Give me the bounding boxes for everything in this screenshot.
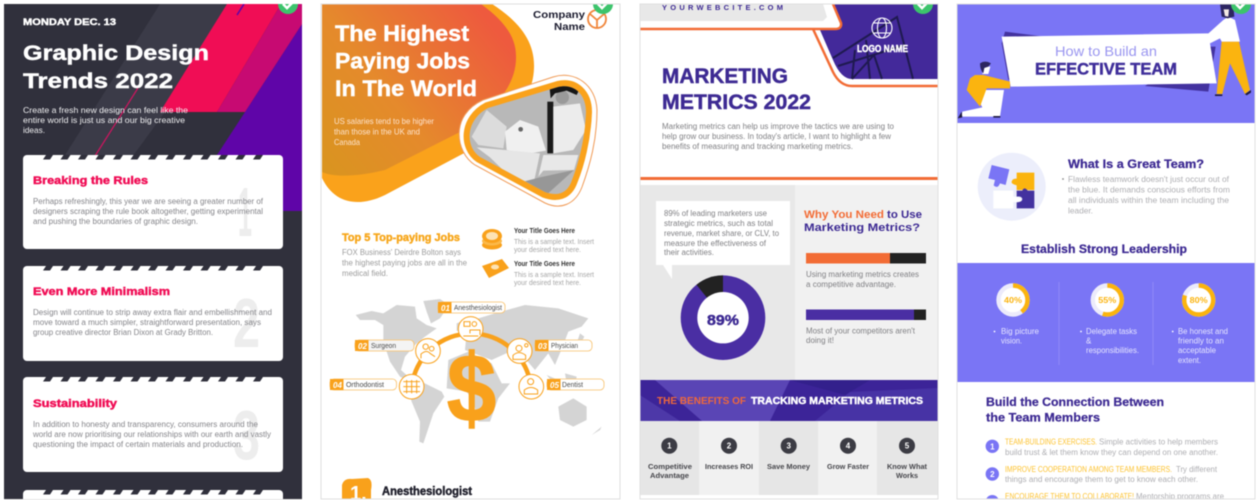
benefit 4 (818, 421, 877, 495)
top web address band: YOURWEBCITE.COM (662, 3, 783, 12)
heading: build the connection: Build the Connection Between (986, 395, 1164, 409)
text: title two: This is a sample text. Insert (514, 270, 595, 279)
card 4: cropped (23, 490, 283, 500)
card 2: even more minimalism: Design will continue to strip away extra flair and embellishment and (33, 308, 272, 317)
panel: effective team (957, 0, 1255, 500)
callout: measure the effectiveness of (664, 239, 767, 248)
card 1: breaking the rules: Perhaps refreshingly, this year we are seeing a greater number of (33, 197, 264, 206)
list: delegate tasks: Delegate tasks (1086, 327, 1137, 336)
title: Trends 2022 (23, 69, 173, 93)
benefit 1: Advantage (650, 471, 689, 480)
subtitle (334, 116, 434, 147)
card 3: sustainability: Sustainability (33, 398, 118, 410)
label 05 dentist: Dentist (562, 380, 584, 389)
list item 1: 1 (990, 442, 995, 451)
label 05 dentist: 05 (550, 381, 559, 390)
donut chart 89% (681, 275, 765, 360)
subtitle: Canada (334, 137, 360, 147)
callout: strategic metrics, such as total (664, 219, 773, 228)
title (22, 43, 209, 90)
title: METRICS 2022 (662, 91, 811, 114)
text: title one: This is a sample text. Insert (514, 237, 595, 246)
callout: revenue, market share, or CLV, to (664, 229, 780, 238)
card 1: breaking the rules: 1 (238, 173, 252, 251)
bar two: Most of your competitors aren't (806, 326, 916, 336)
gauge 40% (998, 286, 1028, 314)
company logo: Company (533, 9, 585, 21)
gauge 80% (1184, 286, 1213, 314)
donut chart 89%: 89% (707, 312, 739, 329)
card 1: breaking the rules: designers scraping the rule book altogether, getting experimental (33, 207, 263, 216)
benefit 4: 4 (846, 442, 851, 451)
right bars column (795, 185, 938, 380)
callout: their activities. (664, 248, 714, 257)
job icons (399, 317, 544, 399)
card 3: sustainability: world are now prioritising our relationships with our earth and vastly (32, 430, 271, 439)
icon: puzzle (978, 153, 1046, 221)
heading: anesthesiologist: Anesthesiologist (382, 486, 472, 498)
company logo (533, 9, 606, 33)
label 03 physician: 03 (538, 342, 547, 351)
gauge 40%: 40% (1004, 296, 1022, 305)
list: big picture (994, 327, 1040, 346)
benefit 1: Competitive (648, 462, 692, 471)
heading: Why You Need (804, 209, 884, 221)
heading: Marketing Metrics? (804, 222, 920, 234)
list: delegate tasks (1080, 327, 1139, 355)
heading: to Use (887, 209, 922, 221)
heading: anesthesiologist (342, 478, 472, 500)
title (662, 67, 812, 110)
title: The Highest (335, 21, 470, 46)
intro text: Marketing metrics can help us improve the tactics we are using to (662, 122, 895, 131)
arc with dollar sign (412, 333, 531, 442)
label 03 physician (535, 340, 592, 351)
illustration: standing woman (1207, 4, 1251, 96)
label 01 anesthesiologist (438, 302, 505, 313)
benefit 5: 5 (905, 442, 910, 451)
card 3: sustainability: questioning the impact of certain materials and production. (33, 440, 243, 449)
subtitle: US salaries tend to be higher (334, 116, 434, 126)
photo in rounded triangle (459, 75, 597, 206)
section: top 5 jobs: medical field. (342, 269, 388, 278)
card 3: sustainability (23, 377, 283, 474)
icon: coins (482, 229, 502, 250)
card 2: even more minimalism: Even More Minimalism (33, 286, 170, 298)
panel: marketing metrics (640, 0, 938, 499)
intro text: help grow our business. In today's article, I want to highlight a few (662, 132, 891, 141)
header photo (640, 4, 938, 86)
heading (804, 209, 922, 234)
text: title two: Your Title Goes Here (514, 259, 575, 268)
logo (857, 18, 908, 55)
benefit 1: 1 (667, 442, 672, 451)
label 05 dentist (547, 379, 604, 390)
benefit 3: 3 (786, 442, 791, 451)
heading: build the connection: the Team Members (986, 411, 1100, 425)
label 02 surgeon: Surgeon (371, 341, 396, 350)
text: title one: your desired text here. (514, 245, 581, 254)
section: top 5 jobs: the highest paying jobs are all in the (342, 258, 468, 268)
section: top 5 jobs: Top 5 Top-paying Jobs (342, 232, 460, 244)
text: what is a great team: Flawless teamwork doesn't just occur out of (1068, 175, 1230, 184)
text: what is a great team: the blue. It demands conscious efforts from (1068, 186, 1230, 194)
top web address band (640, 3, 827, 21)
banner: benefits: THE BENEFITS OF (657, 395, 747, 407)
benefit 3 (759, 421, 818, 495)
list item 2: 2 (990, 470, 995, 479)
banner: benefits (640, 380, 938, 421)
benefit 5 (877, 421, 938, 495)
callout (656, 201, 790, 279)
text: title two (514, 259, 595, 287)
label 04 orthodontist: 04 (333, 381, 342, 390)
list item 2: things and encourage them to get to know each other. (1005, 475, 1198, 484)
logo: LOGO NAME (857, 44, 908, 55)
list: big picture: Big picture (1001, 327, 1040, 336)
heading: establish strong leadership: Establish Strong Leadership (1021, 242, 1187, 256)
list: be honest: friendly to an (1178, 336, 1224, 346)
intro text (23, 105, 188, 135)
card 2: even more minimalism (23, 266, 283, 362)
gauge 80%: 80% (1190, 296, 1208, 305)
panel: graphic design trends (4, 0, 302, 500)
bar one (806, 253, 926, 289)
list: delegate tasks: responsibilities. (1086, 346, 1139, 355)
list item 2: IMPROVE COOPERATION AMONG TEAM MEMBERS. (1005, 465, 1172, 474)
list: be honest: extent. (1178, 356, 1201, 365)
intro text: Create a fresh new design can feel like the (23, 105, 188, 115)
panel: highest paying jobs (321, 0, 620, 500)
text: what is a great team: all individuals within the team including the (1068, 196, 1230, 205)
intro text (662, 122, 895, 151)
card 3: sustainability: In addition to honesty and transparency, consumers around the (33, 420, 259, 429)
benefit 2: 2 (727, 442, 732, 451)
benefit 2: Increases ROI (705, 462, 753, 471)
label 02 surgeon: 02 (358, 342, 367, 351)
arc with dollar sign: $ (447, 335, 496, 442)
card 1: breaking the rules: and pushing the boundaries of graphic design. (33, 217, 198, 226)
card 1: breaking the rules (23, 155, 283, 251)
icon: green badge (913, 0, 933, 14)
label 01 anesthesiologist: Anesthesiologist (454, 303, 503, 312)
card 2: even more minimalism: group creative director Brian Dixon at Grady Britton. (33, 328, 213, 337)
title: Paying Jobs (335, 48, 470, 74)
left stats column (640, 185, 795, 380)
bar two: doing it! (806, 336, 834, 345)
intro text: benefits of measuring and tracking marketing metrics. (662, 142, 853, 151)
benefit 2 (699, 421, 759, 495)
subtitle: than those in the UK and (334, 126, 420, 136)
list: big picture: vision. (1001, 336, 1022, 346)
gauge 55% (1093, 286, 1122, 314)
header band: How to Build an (1055, 43, 1157, 59)
list: be honest: Be honest and (1178, 327, 1228, 336)
list item 1: Simple activities to help members (1099, 438, 1218, 447)
icon: green badge (593, 0, 613, 14)
title: Graphic Design (23, 41, 209, 65)
text: title one: Your Title Goes Here (514, 226, 575, 235)
list item 1: build trust & let them know they can depend on one another. (1005, 448, 1218, 457)
benefit 3: Save Money (767, 462, 811, 471)
label 03 physician: Physician (551, 341, 578, 350)
panel: leadership stats (957, 263, 1255, 382)
date line: MONDAY DEC. 13 (23, 17, 116, 28)
label 04 orthodontist: Orthodontist (346, 380, 385, 389)
card 2: even more minimalism: 2 (233, 284, 260, 362)
benefit 5: Works (896, 471, 918, 480)
company logo: Name (554, 21, 585, 33)
benefit 4: Grow Faster (827, 462, 869, 471)
intro text: entire world is just us and our big creative (23, 115, 185, 125)
header band: EFFECTIVE TEAM (1035, 61, 1177, 79)
card 2: even more minimalism: move toward a much simpler, straightforward presentation, says (33, 318, 261, 327)
list: be honest: acceptable (1178, 346, 1217, 355)
text: title two: your desired text here. (514, 278, 581, 287)
world map (356, 299, 602, 443)
title: In The World (335, 76, 477, 101)
title (335, 21, 477, 101)
icon: money stack (482, 259, 509, 278)
label 04 orthodontist (330, 379, 396, 390)
section: top 5 jobs: FOX Business' Deirdre Bolton says (342, 248, 461, 257)
intro text: ideas. (23, 125, 45, 135)
illustration: kneeling man (958, 62, 1010, 118)
list item 3 (986, 492, 1225, 500)
header band (957, 4, 1255, 123)
text: what is a great team: What Is a Great Team? (1068, 157, 1204, 171)
benefit 1 (640, 421, 699, 495)
list item 1: TEAM-BUILDING EXERCISES. (1005, 438, 1097, 447)
icon: green badge (1231, 0, 1251, 14)
text: what is a great team (1062, 157, 1230, 216)
text: title one (514, 226, 595, 254)
icon: green badge (278, 0, 298, 14)
bar one: a competitive advantage. (806, 280, 896, 289)
bar two (806, 310, 926, 345)
card 3: sustainability: 3 (233, 396, 260, 474)
orange header blob (322, 4, 534, 202)
list item 2: Try different (1176, 465, 1218, 474)
list: be honest (1172, 327, 1228, 365)
card 1: breaking the rules: Breaking the Rules (33, 175, 148, 187)
list item 1 (986, 438, 1218, 457)
heading: build the connection (986, 395, 1164, 425)
banner: benefits: TRACKING MARKETING METRICS (751, 395, 923, 407)
list item 2 (986, 465, 1218, 484)
callout: 89% of leading marketers use (664, 209, 768, 218)
label 01 anesthesiologist: 01 (441, 304, 450, 313)
section: top 5 jobs (342, 232, 468, 278)
label 02 surgeon (355, 340, 414, 351)
benefit 5: Know What (887, 462, 927, 471)
bar one: Using marketing metrics creates (806, 270, 919, 279)
text: what is a great team: leader. (1068, 206, 1093, 216)
gauge 55%: 55% (1098, 296, 1116, 305)
title: MARKETING (662, 65, 788, 88)
list: delegate tasks: & (1086, 336, 1092, 346)
